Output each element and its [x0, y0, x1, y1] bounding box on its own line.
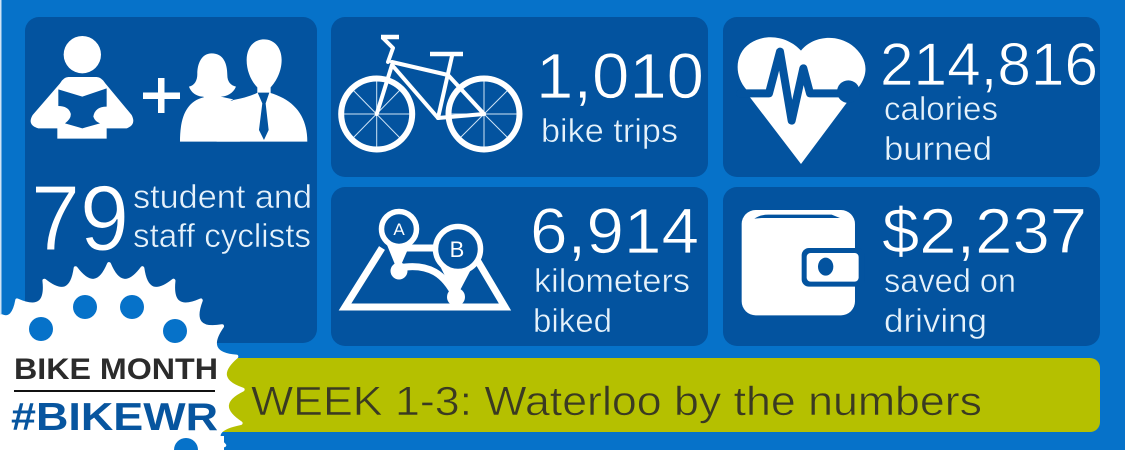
panel: bike trips — [331, 17, 708, 177]
icon: bicycle — [341, 37, 520, 150]
icon: staff woman and man — [180, 39, 307, 142]
panel: savings — [723, 187, 1100, 346]
stat: 6,914: 6,914 — [530, 195, 699, 267]
label: saved on driving — [884, 262, 1016, 339]
label: kilometers biked — [533, 262, 690, 339]
icon: plus — [143, 78, 180, 113]
label: calories burned: burned — [884, 130, 992, 167]
panel: cyclists — [25, 17, 317, 343]
text: BIKE MONTH: BIKE MONTH — [14, 353, 218, 386]
label: student and staff cyclists: student and — [133, 178, 312, 215]
label: student and staff cyclists — [133, 178, 312, 254]
label: saved on driving: driving — [884, 302, 987, 339]
label: student and staff cyclists: staff cyclists — [133, 217, 311, 254]
icon: heart with pulse — [738, 37, 865, 164]
gear holes — [29, 295, 198, 450]
label: kilometers biked: kilometers — [534, 262, 690, 299]
icon: map with route A to B — [345, 212, 505, 307]
label: calories burned: calories — [884, 90, 998, 127]
banner: week heading — [200, 358, 1100, 432]
stat: $2,237: $2,237 — [882, 195, 1087, 267]
banner: week heading: WEEK 1-3: Waterloo by the numbers — [251, 378, 982, 424]
icon: wallet — [742, 210, 865, 315]
gear shape — [0, 264, 243, 450]
icon: map with route A to B: A — [393, 220, 405, 239]
icon: map with route A to B: B — [450, 237, 464, 262]
badge: bike month gear — [0, 264, 243, 450]
stat: 214,816: 214,816 — [880, 31, 1098, 98]
stat: 79: 79 — [31, 166, 129, 270]
label: calories burned — [884, 90, 998, 167]
label: saved on driving: saved on — [884, 262, 1016, 299]
panel: calories — [723, 17, 1100, 177]
stat: 1,010: 1,010 — [536, 40, 704, 112]
label: bike trips: bike trips — [541, 112, 678, 149]
label: kilometers biked: biked — [533, 302, 612, 339]
icon: student reading — [31, 36, 133, 139]
panel: kilometers — [331, 187, 708, 346]
text: #BIKEWR: #BIKEWR — [11, 396, 218, 439]
